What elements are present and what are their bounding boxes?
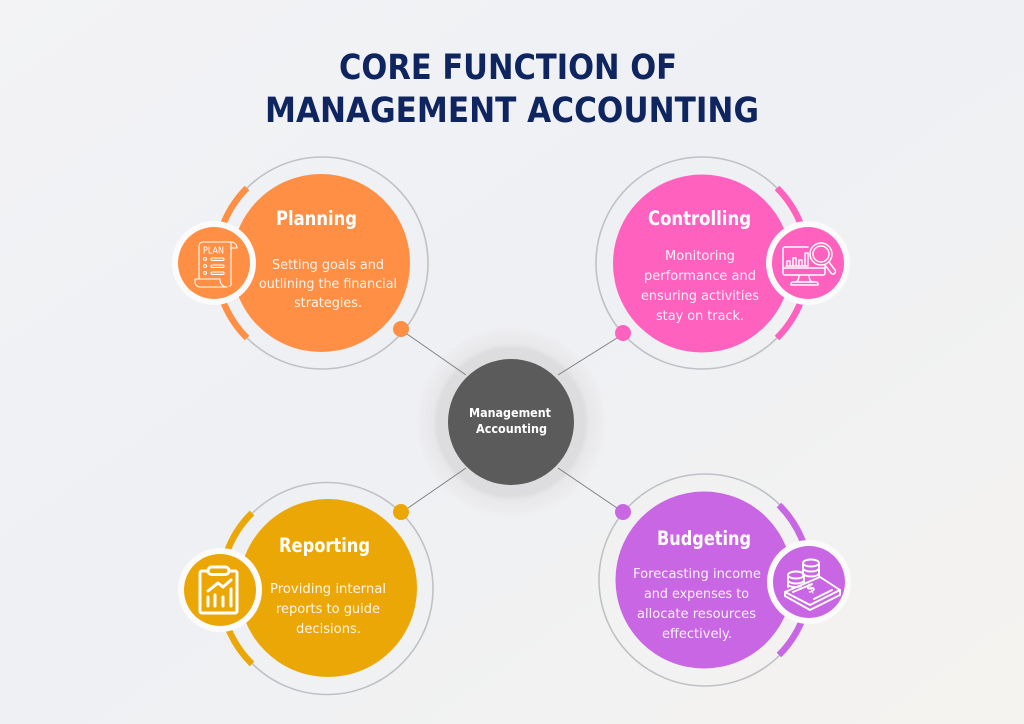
- title: [265, 48, 759, 131]
- connector lines: [407, 334, 617, 508]
- text: budgeting description: allocate resources: [637, 606, 756, 622]
- text: center label: Management: [469, 405, 551, 420]
- text: controlling description: [641, 248, 759, 324]
- title: MANAGEMENT ACCOUNTING: [265, 91, 759, 131]
- heading: budgeting: Budgeting: [657, 527, 751, 550]
- text: controlling description: stay on track.: [656, 308, 744, 324]
- panel: budgeting: [599, 474, 851, 686]
- text: center label: [469, 405, 551, 436]
- heading: planning: Planning: [276, 207, 357, 230]
- text: reporting description: [270, 581, 386, 637]
- text: planning description: strategies.: [294, 295, 362, 311]
- text: controlling description: performance and: [644, 268, 756, 284]
- center node: management accounting: [448, 359, 574, 485]
- text: reporting description: reports to guide: [276, 601, 380, 617]
- text: budgeting description: effectively.: [662, 626, 732, 642]
- icon: coins and cash: $: [804, 580, 817, 596]
- heading: reporting: Reporting: [279, 534, 370, 557]
- text: planning description: outlining the financial: [259, 276, 397, 292]
- text: center label: Accounting: [476, 421, 547, 436]
- text: controlling description: ensuring activities: [641, 288, 759, 304]
- panel: planning: [172, 157, 428, 369]
- text: budgeting description: Forecasting income: [633, 566, 761, 582]
- text: budgeting description: [633, 566, 761, 642]
- icon: plan scroll: [172, 221, 256, 305]
- heading: controlling: Controlling: [648, 207, 751, 230]
- text: planning description: [259, 257, 397, 311]
- text: planning description: Setting goals and: [272, 257, 384, 273]
- icon: coins and cash: [767, 540, 851, 624]
- icon: plan scroll: PLAN: [203, 246, 224, 256]
- panel: reporting: [178, 482, 433, 694]
- text: reporting description: Providing internal: [270, 581, 386, 597]
- text: controlling description: Monitoring: [665, 248, 735, 264]
- text: reporting description: decisions.: [296, 621, 361, 637]
- center halo: [414, 325, 608, 519]
- title: CORE FUNCTION OF: [339, 48, 677, 88]
- text: budgeting description: and expenses to: [644, 586, 749, 602]
- panel: controlling: [596, 157, 850, 369]
- icon: clipboard chart: [178, 548, 262, 632]
- icon: monitor with magnifier: [766, 221, 850, 305]
